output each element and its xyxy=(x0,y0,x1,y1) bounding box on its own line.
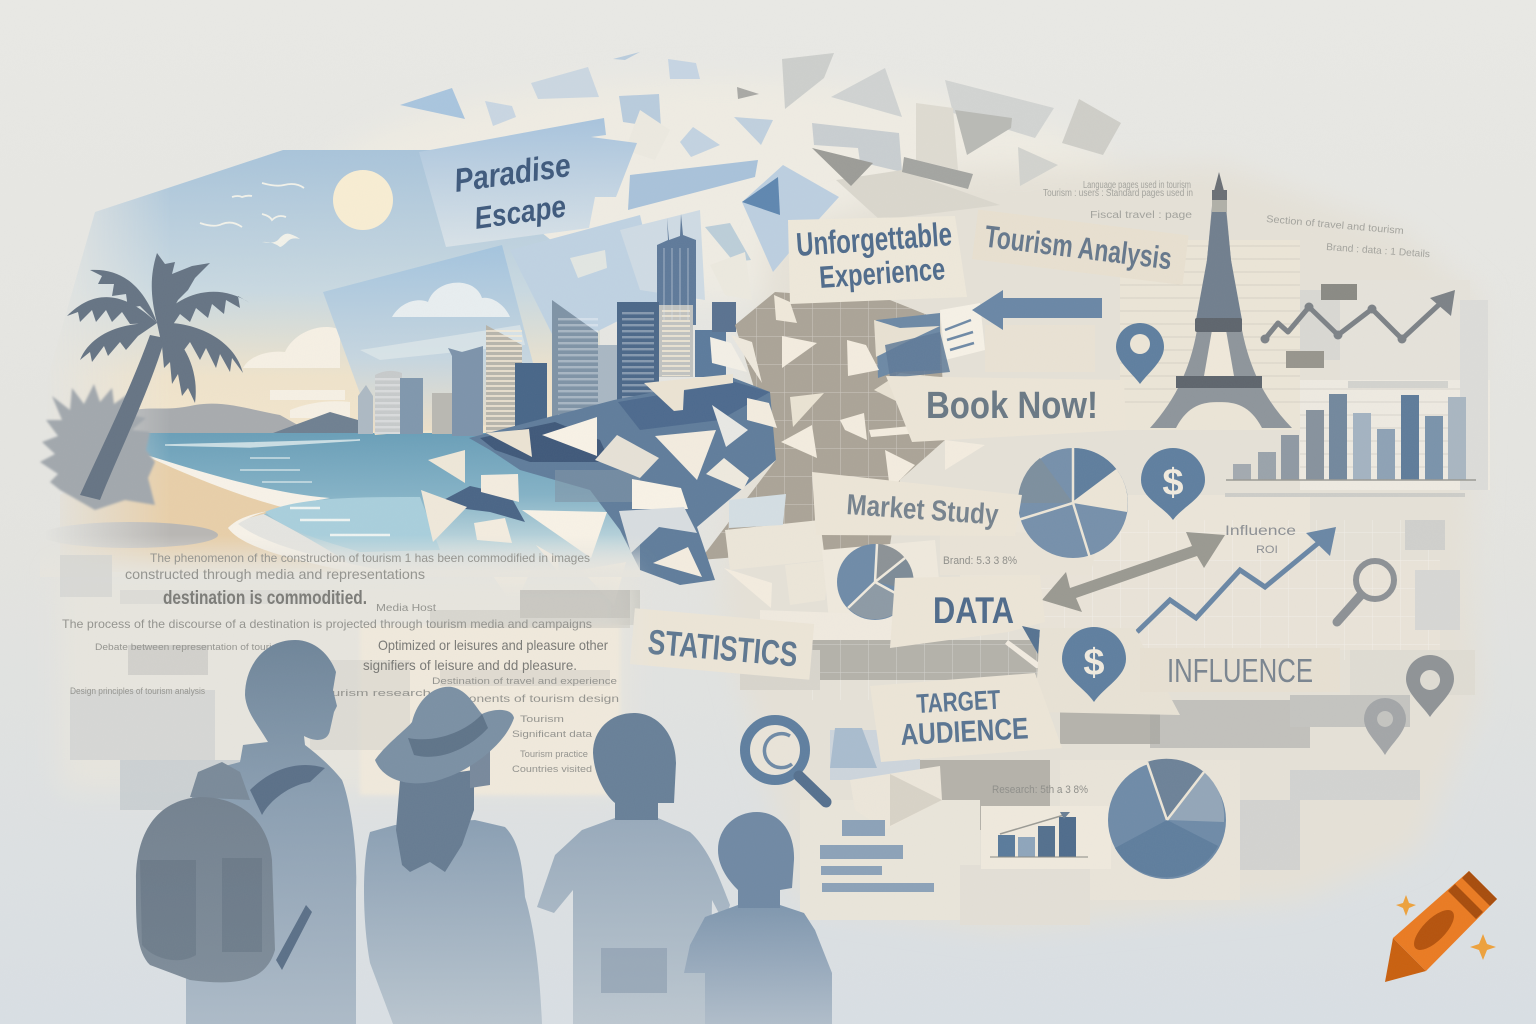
small report text upper right: Brand : data : 1 Details xyxy=(1326,242,1430,260)
text block: commodification notes xyxy=(62,551,619,774)
cream triangle shards xyxy=(421,295,985,608)
floating fragments xyxy=(400,52,1121,272)
palm fronds xyxy=(67,253,250,403)
icon: dollar pin lower: $ xyxy=(1083,642,1105,684)
label: TARGET AUDIENCE: AUDIENCE xyxy=(900,712,1029,752)
icon: dollar pin upper: $ xyxy=(1162,462,1184,504)
small bar chart xyxy=(981,806,1111,869)
text block: commodification notes: Tourism practice xyxy=(520,749,588,759)
boy body xyxy=(537,818,730,1024)
foam xyxy=(148,456,341,569)
text block: commodification notes: constructed through media and representations xyxy=(125,566,425,582)
text block: commodification notes: Tourism research xyxy=(316,688,431,698)
sea xyxy=(145,433,634,559)
panel: brown torn centre with grid xyxy=(700,292,1040,700)
label: Tourism Analysis: Tourism Analysis xyxy=(983,219,1174,276)
blue zigzag arrow xyxy=(1137,527,1336,632)
icon: blue magnifier xyxy=(745,720,826,802)
icon: Eiffel Tower xyxy=(1150,172,1292,428)
man with backpack xyxy=(136,640,356,1024)
paper: Paradise Escape: Paradise xyxy=(452,146,573,199)
paper strips behind charts xyxy=(520,520,1100,640)
text block: commodification notes: The phenomenon of the construction of tourism 1 has been commodified in images xyxy=(150,551,590,565)
text block: commodification notes: Optimized or leisures and pleasure other xyxy=(378,637,608,653)
pin two xyxy=(1364,698,1406,755)
pie chart: large centre-right xyxy=(1018,448,1128,558)
text block: commodification notes: signifiers of leisure and dd pleasure. xyxy=(363,657,577,673)
label: Unforgettable Experience xyxy=(788,215,967,304)
backpack straps xyxy=(250,765,325,970)
panel: dark collage terrain xyxy=(434,377,776,585)
panel: beach scene xyxy=(30,150,640,572)
pie chart: small xyxy=(837,544,914,620)
label: INFLUENCE: INFLUENCE xyxy=(1167,652,1313,689)
skyline small buildings xyxy=(358,385,373,434)
mid towers xyxy=(448,346,483,436)
child body xyxy=(684,905,832,1024)
ROI caption xyxy=(1225,522,1296,556)
woman body xyxy=(364,820,542,1024)
text block: commodification notes: The process of the discourse of a destination is projected through tourism media and campaigns xyxy=(62,617,592,631)
panel: analysis paper backdrop xyxy=(720,165,1490,930)
sea glints xyxy=(165,439,360,483)
icon: documents and blue arrow xyxy=(885,290,1102,378)
label: Book Now!: Book Now! xyxy=(926,385,1098,427)
text block: commodification notes: Tourism xyxy=(520,714,564,724)
text block: commodification notes: Significant data xyxy=(512,729,592,739)
people: family silhouettes xyxy=(136,640,832,1024)
crayon tip xyxy=(1385,938,1426,982)
panel: sky paper collage xyxy=(510,210,752,350)
backpack pockets xyxy=(140,858,262,960)
small report text upper right: Language pages used in tourism xyxy=(1083,180,1191,191)
ROI caption: ROI xyxy=(1256,544,1278,556)
small report text upper right: Fiscal travel : page xyxy=(1090,210,1193,221)
palm trunk xyxy=(80,335,165,500)
sparkles xyxy=(1396,895,1496,960)
icon: location pin xyxy=(1116,323,1164,384)
small report text upper right: Tourism : users : Standard pages used in xyxy=(1043,188,1193,199)
label: Market Study: Market Study xyxy=(846,489,999,532)
small report text upper right xyxy=(1043,180,1430,260)
paper: Paradise Escape xyxy=(419,118,637,247)
panel: faded paper text area xyxy=(60,555,630,810)
text block: commodification notes: destination is commoditied. xyxy=(163,588,367,609)
label: STATISTICS xyxy=(630,608,814,680)
logo: crayon xyxy=(1385,871,1497,982)
text block: commodification notes: Countries visited xyxy=(512,764,592,774)
line chart with arrow xyxy=(1260,284,1455,368)
label: Tourism Analysis xyxy=(972,210,1189,285)
icon: dollar pin upper xyxy=(1141,448,1205,520)
icon: dollar pin lower xyxy=(1062,627,1126,702)
label: INFLUENCE xyxy=(1140,648,1340,692)
distant mountains xyxy=(132,404,296,433)
text block: commodification notes: Debate between representation of tourism xyxy=(95,642,285,652)
pie chart: lower right xyxy=(1108,759,1226,879)
sand xyxy=(64,458,330,568)
cream paper glow behind the flying fragments xyxy=(320,80,1120,300)
paper behind dollar pin xyxy=(1035,628,1180,715)
hat xyxy=(375,687,514,783)
text block: commodification notes: Design principles of tourism analysis xyxy=(70,686,205,696)
bar chart xyxy=(1225,381,1476,497)
label: Market Study xyxy=(812,472,1022,536)
shadow on sand xyxy=(67,522,218,548)
woman hair xyxy=(396,770,474,872)
text block: commodification notes: Components of tourism design xyxy=(432,694,619,705)
fade of the sand into the text paper xyxy=(40,535,640,577)
icon: foreground shrub xyxy=(40,384,155,510)
paper: Paradise Escape: Escape xyxy=(472,188,568,236)
panel: torn landscape photo with cloud xyxy=(323,245,548,435)
small stat text: Brand: 5.3 3 8% xyxy=(943,555,1017,567)
text block: commodification notes: Destination of travel and experience xyxy=(432,676,617,686)
label: DATA xyxy=(890,575,1046,668)
child head xyxy=(718,812,794,908)
crayon body xyxy=(1393,871,1497,971)
pin one xyxy=(1406,655,1454,717)
label: TARGET AUDIENCE: TARGET xyxy=(916,685,1002,719)
sky xyxy=(76,150,600,433)
headland xyxy=(273,412,362,433)
small report text upper right: Section of travel and tourism xyxy=(1266,214,1404,237)
boy head xyxy=(593,713,676,820)
icon: palm tree xyxy=(67,253,250,500)
child xyxy=(684,812,832,1024)
backpack handle loop xyxy=(190,762,250,800)
boy xyxy=(537,713,730,1024)
label: TARGET AUDIENCE xyxy=(870,673,1062,762)
label: Unforgettable Experience: Unforgettable xyxy=(795,215,953,263)
horizontal bars xyxy=(820,820,934,892)
label: Unforgettable Experience: Experience xyxy=(818,251,946,295)
clouds xyxy=(243,327,350,418)
icon: gray map pins xyxy=(1364,655,1454,755)
backpack xyxy=(136,797,275,982)
stat caption lower: Research: 5th a 3 8% xyxy=(992,784,1088,796)
woman with hat xyxy=(364,687,542,1024)
label: STATISTICS: STATISTICS xyxy=(646,623,799,675)
birds xyxy=(200,183,304,227)
label: DATA: DATA xyxy=(933,590,1014,631)
central tall towers xyxy=(657,214,696,325)
city skyline xyxy=(358,214,736,443)
sun xyxy=(333,170,393,230)
ROI caption: Influence xyxy=(1225,522,1296,538)
gull xyxy=(262,234,300,247)
label: Book Now! xyxy=(886,376,1126,442)
gray double arrow xyxy=(1042,532,1225,612)
icon: gray magnifier xyxy=(1337,561,1394,622)
icon: play triangle paper xyxy=(830,728,942,830)
shallow bay xyxy=(265,497,440,552)
woman face xyxy=(470,745,490,788)
photo cloud xyxy=(392,283,510,317)
text block: commodification notes: Media Host xyxy=(376,603,436,614)
